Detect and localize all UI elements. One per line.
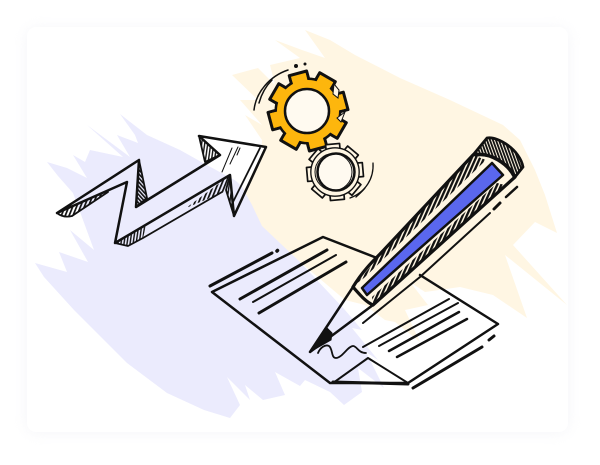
icon: yellow gear	[268, 71, 348, 151]
pencil lead	[310, 327, 332, 352]
signature scribble	[318, 345, 366, 358]
pencil	[310, 138, 523, 352]
icon: motion lines, small gear	[350, 163, 373, 198]
icon: motion lines, yellow gear	[254, 63, 306, 110]
text lines, lower right	[363, 299, 494, 388]
arrow head highlight	[218, 142, 266, 190]
pencil shadow lines	[363, 187, 517, 323]
text lines, upper left	[210, 250, 346, 313]
arrow	[57, 136, 266, 246]
pencil hatching	[356, 155, 505, 303]
document	[210, 237, 498, 388]
arrow thickness	[57, 136, 260, 246]
pencil cap	[473, 138, 523, 177]
envelope fold	[333, 358, 408, 383]
pencil tip	[310, 287, 373, 352]
paper outline	[212, 237, 498, 383]
icon: small outlined gear	[306, 143, 364, 201]
panel: card	[27, 27, 568, 432]
arrow body	[57, 136, 266, 243]
pencil blue stripe	[362, 163, 503, 295]
card shadow	[27, 29, 568, 432]
brush stroke: lavender	[35, 114, 384, 418]
pencil body	[353, 155, 515, 305]
pencil outline	[353, 155, 515, 305]
brush stroke: cream	[232, 30, 567, 342]
arrow hatching	[57, 136, 234, 246]
